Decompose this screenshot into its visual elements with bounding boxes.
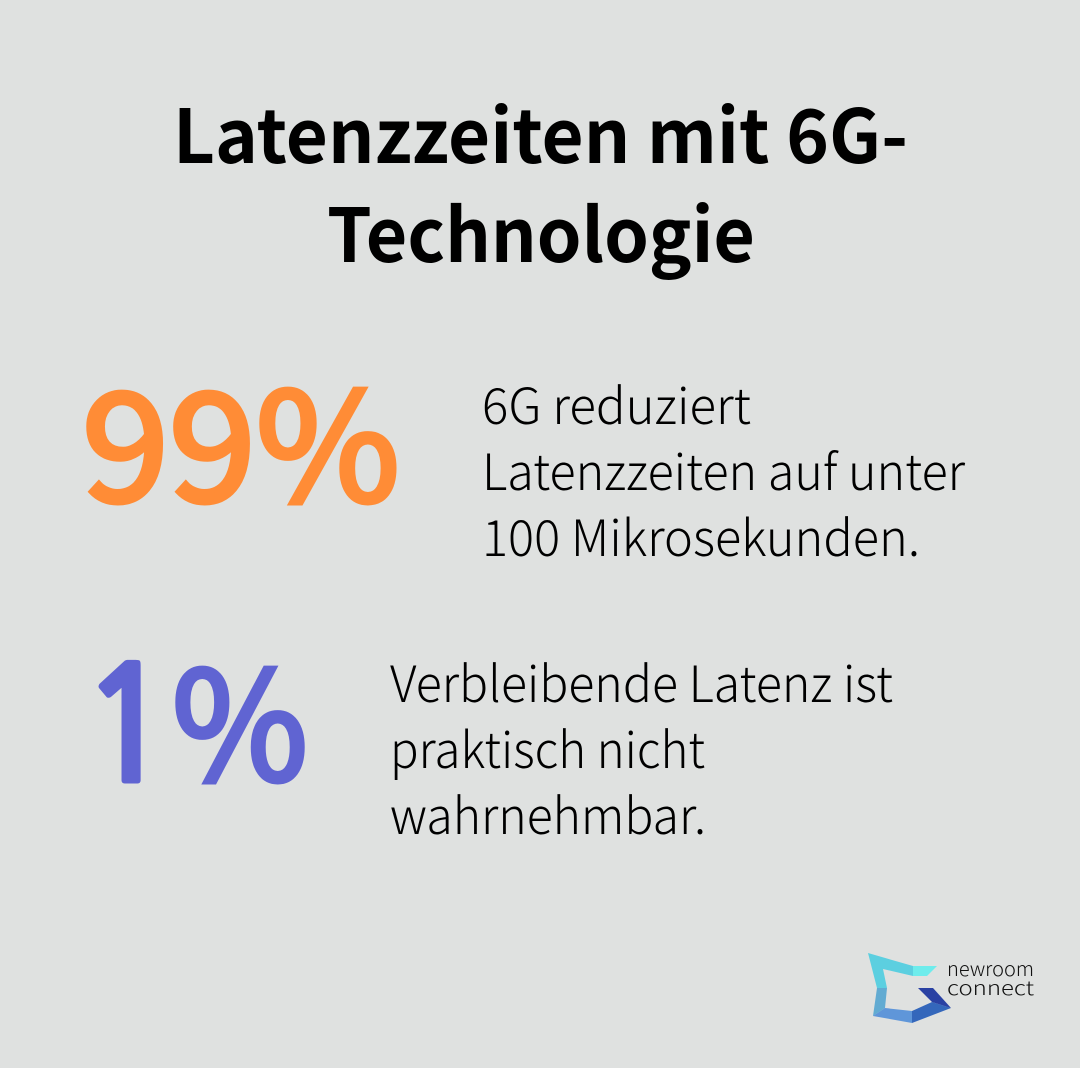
stat: 1%: % (172, 607, 308, 824)
logo wordmark: connect (947, 972, 1034, 1001)
icon: logo mark (868, 953, 951, 1023)
logo wordmark: newroom (947, 953, 1034, 982)
stat: 1%: 1 (79, 647, 176, 806)
title (173, 78, 908, 284)
text block: 1% description: Verbleibende Latenz ist (390, 645, 893, 717)
text block: 99% description: 6G reduziert (482, 367, 751, 439)
text block: 1% description (390, 645, 893, 849)
text block: 99% description: 100 Mikrosekunden. (482, 499, 920, 571)
logo: newroom connect (868, 953, 1034, 1023)
text block: 1% description: wahrnehmbar. (390, 777, 706, 849)
stat: 99%: 99% (82, 328, 400, 545)
text block: 1% description: praktisch nicht (390, 711, 705, 783)
stat: 1% (79, 607, 308, 824)
text block: 99% description: Latenzzeiten auf unter (482, 433, 966, 505)
logo wordmark (947, 953, 1034, 1001)
text block: 99% description (482, 367, 966, 571)
title: Latenzzeiten mit 6G- (173, 78, 908, 185)
title: Technologie (327, 177, 755, 284)
